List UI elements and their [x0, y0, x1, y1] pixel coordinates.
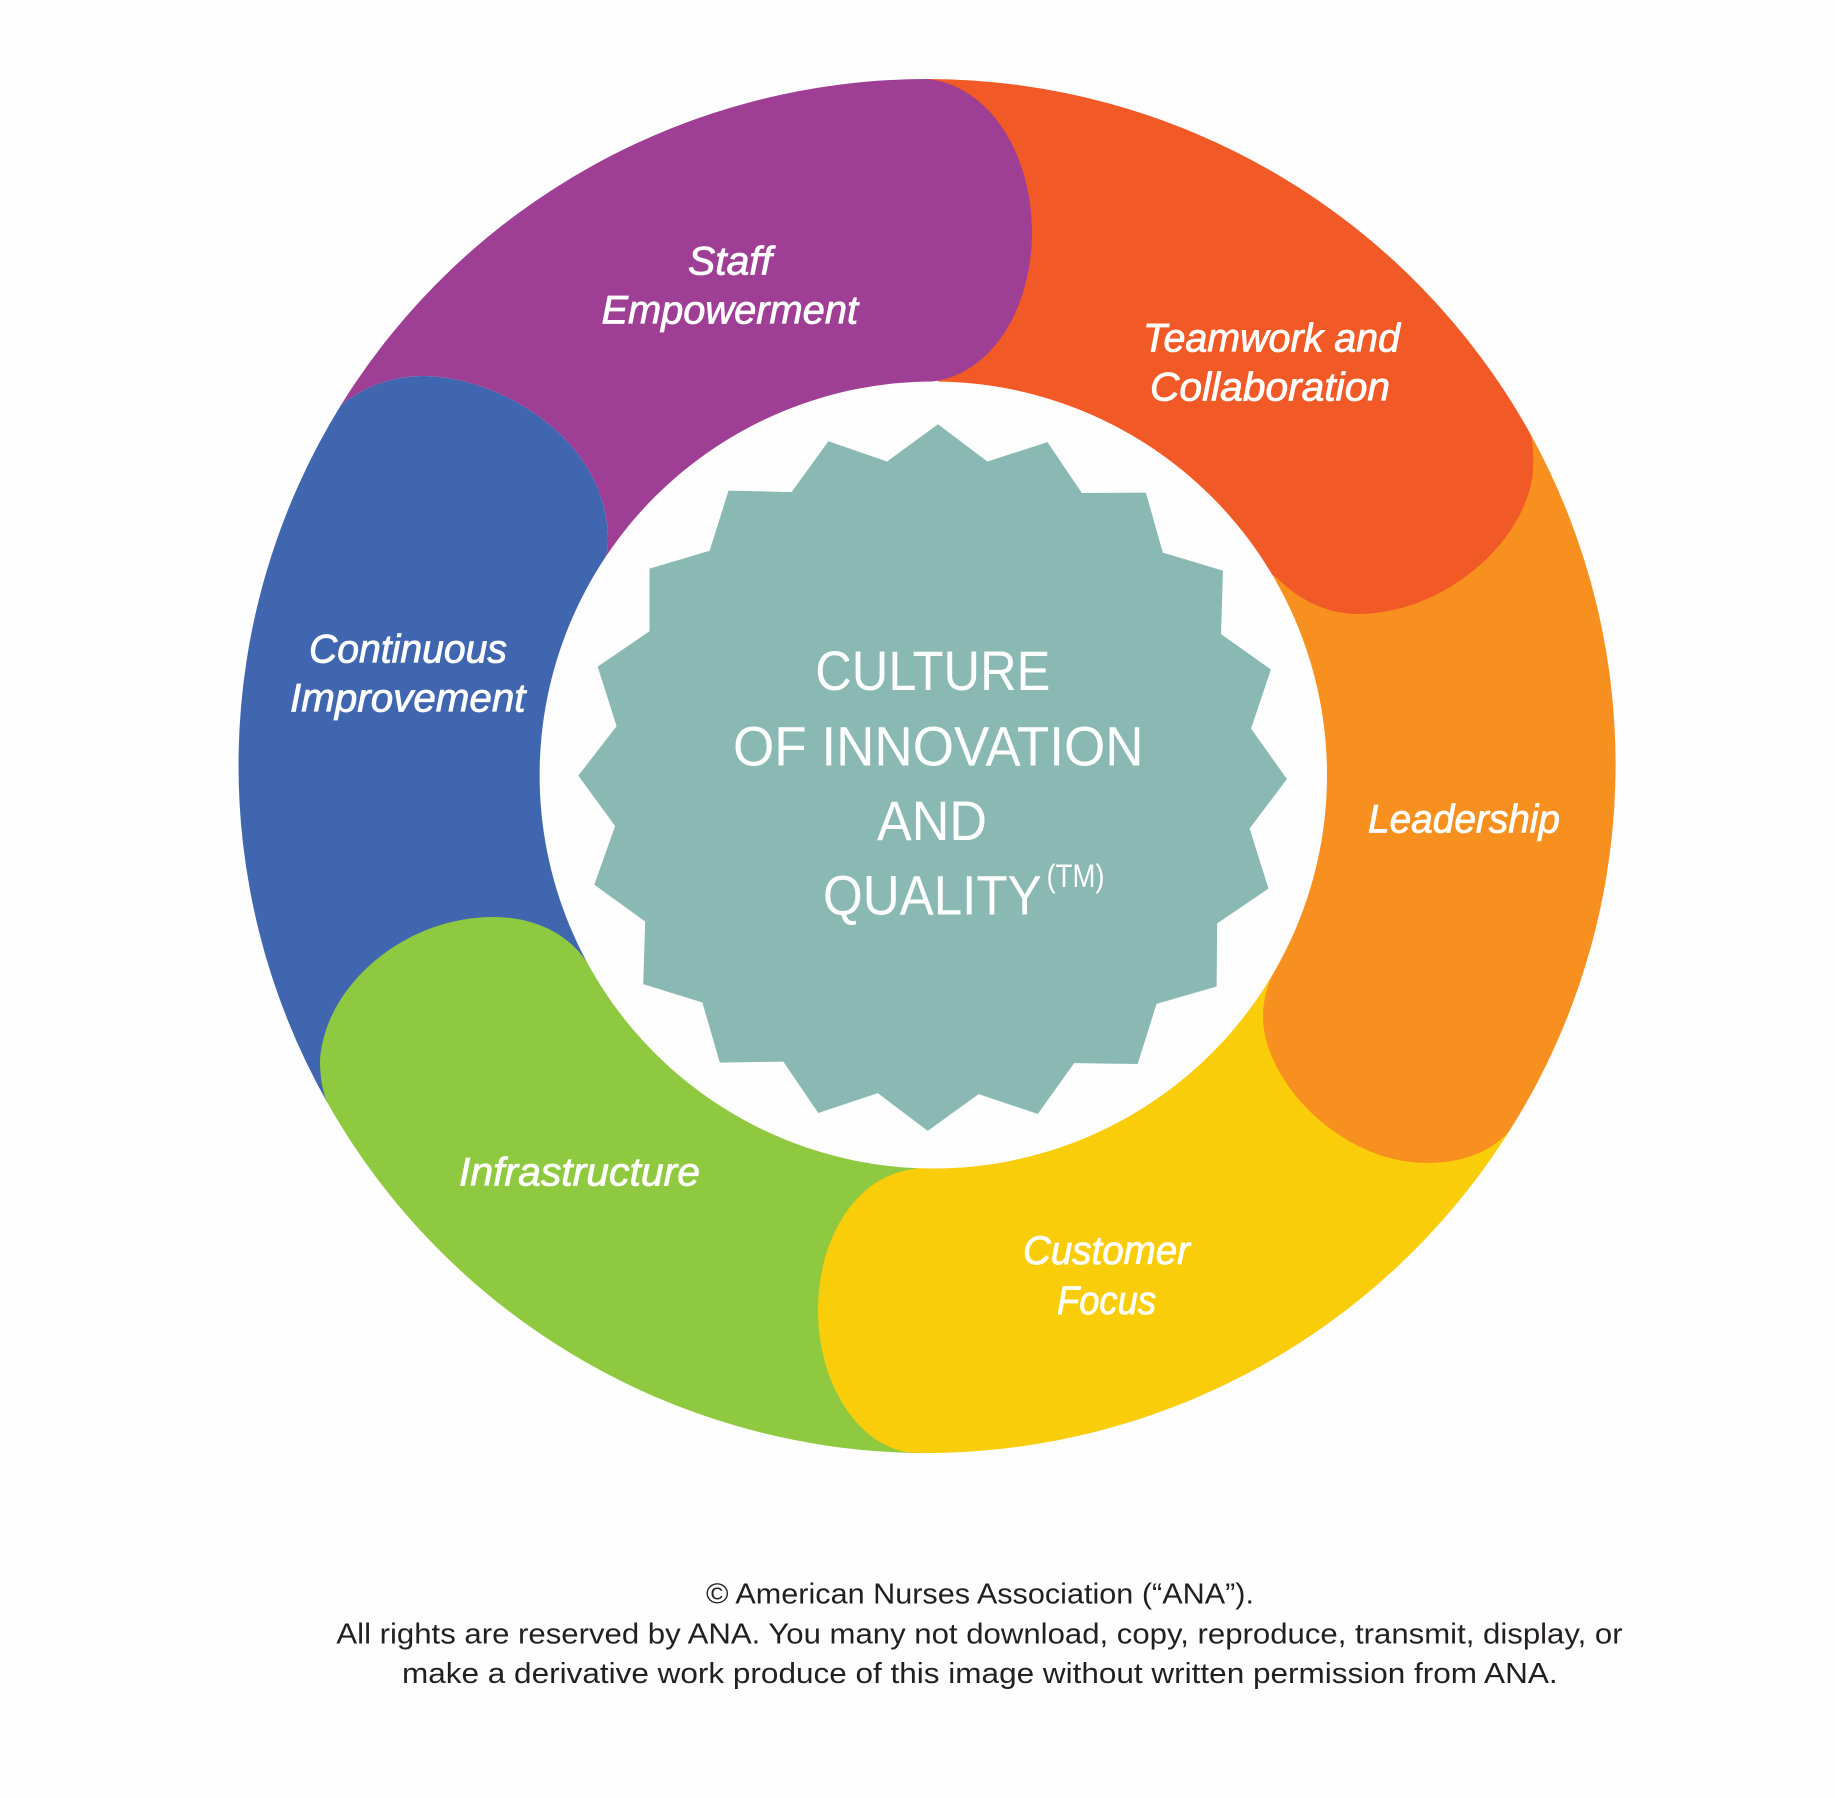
- label: Infrastructure: Infrastructure: [459, 1151, 700, 1195]
- light orange band shape: [1150, 435, 1616, 1163]
- center title: QUALITY: [823, 864, 1042, 927]
- orange band shape: [927, 79, 1533, 614]
- yellow band shape: [818, 900, 1510, 1453]
- center title: (TM): [1046, 858, 1104, 894]
- label: Continuous Improvement: Continuous: [309, 628, 507, 672]
- segment: Continuous Improvement: [239, 376, 700, 1150]
- label: Teamwork and Collaboration: Collaboration: [1150, 366, 1390, 410]
- label: Customer Focus: Focus: [1057, 1279, 1156, 1323]
- label: Staff Empowerment: Staff: [688, 240, 776, 284]
- segment: Customer Focus: [818, 900, 1510, 1453]
- label: Customer Focus: [1023, 1229, 1192, 1323]
- central starburst: [578, 424, 1287, 1131]
- white inner circle: [540, 382, 1327, 1168]
- segment: Leadership: [1150, 435, 1616, 1163]
- segment: Infrastructure: [320, 917, 918, 1453]
- label: Customer Focus: Customer: [1023, 1229, 1192, 1273]
- blue band shape: [239, 376, 700, 1150]
- label: Staff Empowerment: [602, 240, 860, 333]
- copyright notice: © American Nurses Association (“ANA”).: [706, 1578, 1254, 1610]
- copyright notice: [336, 1578, 1623, 1690]
- teal star shape: [578, 424, 1287, 1131]
- label: Continuous Improvement: [290, 628, 527, 721]
- green band shape: [320, 917, 918, 1453]
- label: Leadership: Leadership: [1368, 798, 1560, 842]
- label: Continuous Improvement: Improvement: [290, 677, 527, 721]
- diagram: quality wheel: [239, 79, 1616, 1453]
- copyright notice: make a derivative work produce of this image without written permission from ANA.: [402, 1658, 1558, 1690]
- label: Teamwork and Collaboration: [1143, 317, 1402, 410]
- copyright notice: All rights are reserved by ANA. You many not download, copy, reproduce, transmit, display, or: [336, 1618, 1623, 1650]
- segment: Staff Empowerment: [341, 79, 1032, 565]
- center title: CULTURE: [815, 639, 1050, 702]
- center title: AND: [877, 789, 987, 852]
- center title: OF INNOVATION: [733, 714, 1144, 778]
- label: Staff Empowerment: Empowerment: [602, 289, 860, 333]
- segment: Teamwork and Collaboration: [927, 79, 1533, 614]
- label: Teamwork and Collaboration: Teamwork and: [1143, 317, 1402, 361]
- purple band shape: [341, 79, 1032, 565]
- center title: [733, 639, 1144, 927]
